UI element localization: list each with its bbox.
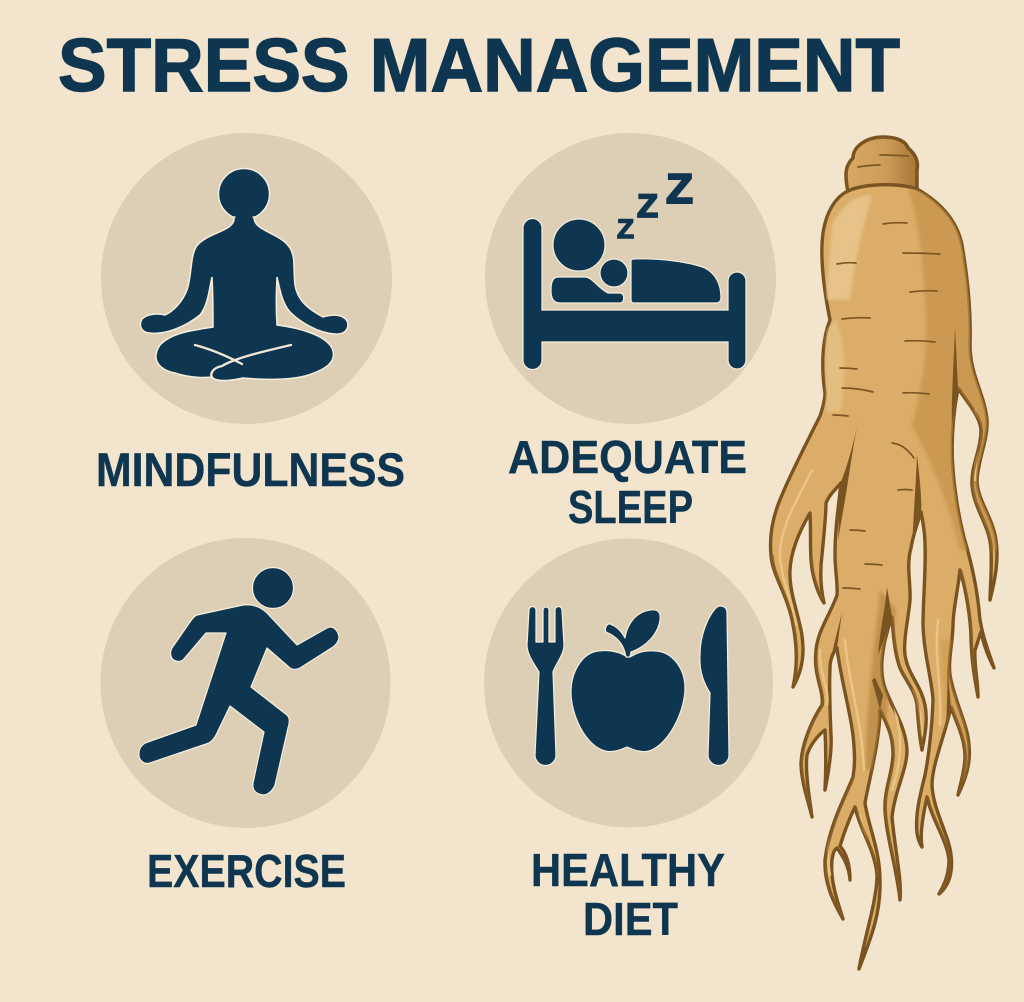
label: healthy diet	[531, 844, 725, 945]
ginseng dark creases between limbs	[830, 327, 958, 725]
ginseng shading	[772, 190, 1000, 919]
ginseng crown	[846, 137, 917, 192]
icon detail: crossed legs	[195, 345, 291, 378]
panel: adequate sleep	[485, 133, 776, 424]
illustration: ginseng root	[770, 137, 1000, 969]
title: STRESS MANAGEMENT	[58, 23, 900, 107]
icon: fork, apple and knife	[527, 606, 729, 766]
ginseng body and roots	[770, 185, 997, 969]
panel: exercise	[100, 538, 390, 828]
icon: snoring Z letters: Z	[617, 214, 634, 244]
icon circle: sleep	[485, 133, 776, 424]
label: mindfulness: MINDFULNESS	[96, 443, 405, 496]
label: exercise: EXERCISE	[147, 845, 346, 897]
ginseng surface wrinkles	[833, 155, 940, 589]
icon: running figure	[139, 568, 339, 795]
icon circle: diet	[484, 538, 773, 828]
label: adequate sleep: SLEEP	[568, 481, 693, 533]
label: adequate sleep: ADEQUATE	[508, 431, 747, 483]
icon circle: mindfulness	[101, 133, 392, 424]
panel: healthy diet	[484, 538, 773, 828]
panel: mindfulness	[101, 133, 392, 424]
icon: meditating figure	[140, 168, 348, 381]
root highlights	[780, 410, 977, 885]
icon: bed with sleeping person	[523, 218, 746, 370]
label: healthy diet: DIET	[583, 893, 678, 945]
label: adequate sleep	[508, 431, 747, 533]
icon: snoring Z letters: Z	[637, 188, 658, 224]
icon: snoring Z letters	[617, 165, 693, 244]
label: healthy diet: HEALTHY	[531, 844, 725, 896]
icon: snoring Z letters: Z	[666, 165, 693, 212]
icon circle: exercise	[100, 538, 390, 828]
